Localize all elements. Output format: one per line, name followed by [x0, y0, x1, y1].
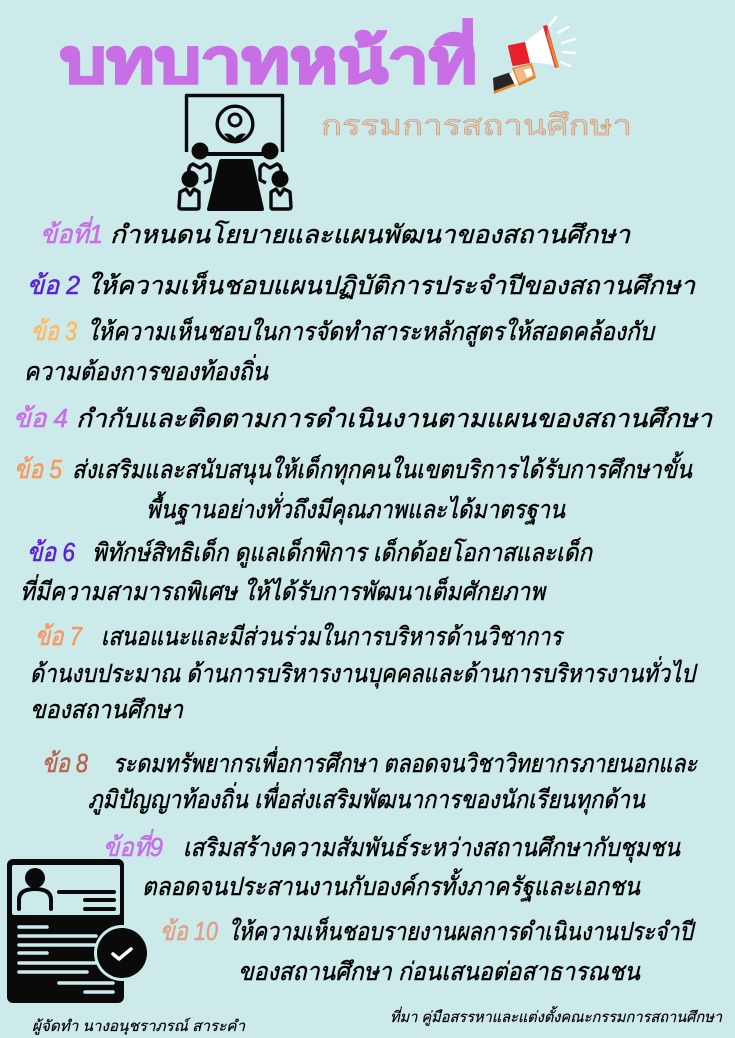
item 7: ของสถานศึกษา: [30, 696, 184, 724]
item 3: ให้ความเห็นชอบในการจัดทำสาระหลักสูตรให้สอดคล้องกับ: [87, 316, 656, 347]
item 7: [30, 621, 698, 724]
item 9: ตลอดจนประสานงานกับองค์กรทั้งภาครัฐและเอกชน: [142, 868, 641, 902]
icon: profile document with check mark: [7, 859, 150, 1003]
item 6: [20, 537, 594, 606]
item 8: ภูมิปัญญาท้องถิ่น เพื่อส่งเสริมพัฒนาการของนักเรียนทุกด้าน: [88, 782, 646, 815]
item 2: ให้ความเห็นชอบแผนปฏิบัติการประจำปีของสถานศึกษา: [87, 270, 696, 300]
icon: megaphone: [493, 17, 575, 94]
item 7: เสนอแนะและมีส่วนร่วมในการบริหารด้านวิชาการ: [101, 622, 564, 651]
item 3: ความต้องการของท้องถิ่น: [24, 354, 269, 386]
item 8: [42, 746, 698, 815]
item 10: ของสถานศึกษา ก่อนเสนอต่อสาธารณชน: [238, 958, 641, 986]
author credit: ผู้จัดทำ นางอนุชราภรณ์ สาระคำ: [32, 1017, 246, 1035]
item 5: พื้นฐานอย่างทั่วถึงมีคุณภาพและได้มาตรฐาน: [146, 491, 566, 525]
item 8: ข้อ 8: [42, 748, 88, 778]
item 2: ข้อ 2: [27, 270, 81, 300]
icon: committee meeting board: [179, 96, 291, 211]
item 10: [160, 916, 696, 986]
item 1: กำหนดนโยบายและแผนพัฒนาของสถานศึกษา: [110, 220, 631, 249]
item 7: ข้อ 7: [35, 621, 83, 651]
item 9: [103, 829, 681, 902]
item 10: ข้อ 10: [160, 916, 218, 946]
item 4: กำกับและติดตามการดำเนินงานตามแผนของสถานศึกษา: [76, 405, 713, 433]
item 6: ข้อ 6: [27, 537, 75, 567]
title: บทบาทหน้าที่: [60, 19, 477, 95]
source credit: ที่มา คู่มือสรรหาและแต่งตั้งคณะกรรมการสถานศึกษา: [390, 1006, 723, 1026]
subtitle: กรรมการสถานศึกษา: [321, 110, 632, 142]
item 3: ข้อ 3: [31, 316, 77, 346]
item 6: พิทักษ์สิทธิเด็ก ดูแลเด็กพิการ เด็กด้อยโอกาสและเด็ก: [92, 537, 594, 568]
item 9: เสริมสร้างความสัมพันธ์ระหว่างสถานศึกษากับชุมชน: [183, 834, 681, 863]
item 9: ข้อที่9: [103, 829, 163, 862]
item 5: ข้อ 5: [14, 454, 62, 484]
item 3: [24, 316, 656, 386]
item 4: ข้อ 4: [13, 403, 68, 433]
item 1: ข้อที่1: [40, 216, 103, 249]
item 5: [14, 451, 693, 525]
item 6: ที่มีความสามารถพิเศษ ให้ได้รับการพัฒนาเต็มศักยภาพ: [20, 574, 547, 606]
